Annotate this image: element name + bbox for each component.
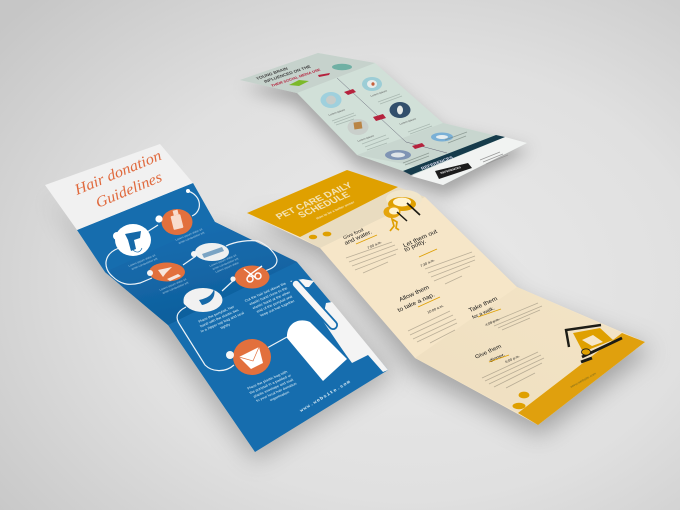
caption: step labels: Lorem ipsum dolor sit	[175, 227, 203, 242]
schedule: food: Give food	[342, 227, 365, 241]
red tags	[344, 89, 425, 149]
leaflet: pet care daily schedule (right)	[247, 170, 645, 425]
footer url: www.website.com	[570, 372, 597, 389]
caption: place ponytail: Place the ponytail, hair	[198, 305, 236, 324]
title: Guidelines	[94, 169, 164, 212]
caption: step labels: amet consectetur elit	[162, 281, 189, 295]
trees icon	[384, 190, 422, 231]
heading: YOUNG BRAIN	[255, 66, 289, 81]
caption: place ponytail: in a zipper top bag and seal	[200, 311, 245, 333]
caption: cut the hair	[244, 282, 296, 317]
step icon: ponytail	[184, 288, 222, 312]
caption: step labels: amet consectetur elit	[212, 257, 239, 271]
schedule: dinner: 6:00 p.m.	[504, 354, 521, 364]
black button	[435, 163, 472, 179]
schedule: food: 7:00 a.m.	[366, 240, 383, 250]
body copy blocks	[346, 242, 544, 388]
captions: Lorem Ipsum	[357, 134, 375, 143]
step icon: label	[191, 243, 229, 261]
title: Hair donation	[72, 147, 164, 199]
step icon: hair dryer	[113, 224, 151, 256]
leaflet: social media infographic (top)	[240, 53, 527, 185]
captions: Lorem Ipsum	[399, 117, 417, 126]
caption: cut the hair: elastic band at the other	[252, 290, 292, 310]
caption: plastic bag: organisation	[269, 391, 290, 402]
schedule: potty: Let them out	[402, 228, 439, 249]
website: www.website.com	[299, 379, 352, 414]
yellow header	[247, 170, 398, 237]
schedule: nap: 10:00 a.m.	[427, 304, 444, 314]
leaflet: social media infographic (top): INFLUENCED ON THE	[263, 64, 312, 84]
white title panel	[45, 144, 193, 230]
caption: step labels: amet consectetur elit	[178, 231, 205, 245]
footer paws	[512, 392, 530, 409]
caption: place ponytail: tightly	[220, 323, 231, 330]
schedule: walk: Take them	[468, 296, 499, 314]
connector path	[106, 191, 287, 371]
navy footer bar	[403, 135, 505, 175]
lower fold panel	[357, 123, 505, 168]
caption: step labels: amet consectetur elit	[131, 257, 158, 271]
caption: step labels	[128, 227, 240, 295]
captions	[328, 89, 417, 143]
step icon: envelope	[226, 339, 271, 375]
schedule: dinner: dinner.	[489, 352, 506, 364]
step icon: bottle	[155, 209, 192, 235]
shaded fold panel	[105, 222, 297, 325]
schedule: potty: to potty.	[403, 238, 428, 253]
yellow footer	[518, 333, 645, 425]
title: SCHEDULE	[296, 190, 353, 220]
title: PET CARE DAILY	[274, 180, 356, 222]
schedule: food	[342, 227, 383, 250]
caption: step labels: Lorem ipsum dolor sit	[128, 253, 156, 268]
caption: cut the hair: elastic band close to the	[249, 286, 288, 306]
captions: Lorem Ipsum	[328, 108, 346, 117]
caption: plastic bag: the ponytail in a padded or	[249, 373, 293, 395]
schedule: walk: for a walk.	[471, 306, 496, 321]
header icons	[332, 64, 352, 70]
schedule: food: and water.	[344, 230, 374, 247]
header panel	[240, 53, 375, 93]
beige body	[247, 170, 645, 425]
centre timeline	[337, 78, 447, 153]
schedule: potty: 7:30 a.m.	[419, 258, 436, 268]
mailbox illustration	[287, 279, 388, 381]
tan band	[300, 187, 425, 248]
caption: step labels: Lorem ipsum dolor sit	[159, 277, 187, 292]
captions: Lorem Ipsum	[370, 89, 388, 98]
step icon: hands	[147, 262, 185, 282]
caption: plastic bag	[247, 370, 298, 403]
caption: cut the hair: Cut the hair just above the	[244, 282, 287, 303]
caption: cut the hair: end of the ponytail and	[256, 295, 293, 314]
leaflet: social media infographic (top): THEIR SOCIAL MEDIA USE	[271, 68, 322, 88]
caption: step labels: Lorem ipsum dolor sit	[209, 253, 237, 268]
white footer strip	[411, 137, 527, 185]
fold panel	[415, 287, 622, 413]
schedule: nap: to take a nap.	[396, 292, 436, 314]
caption: cut the hair: keep out hair together	[259, 299, 296, 317]
caption: place ponytail: band with the elastic ties	[199, 308, 240, 328]
leaflet: social media infographic (top): REFERENCES	[439, 165, 462, 175]
schedule: nap	[396, 284, 444, 314]
surface shadows	[50, 72, 652, 462]
schedule: potty	[402, 228, 439, 268]
caption: plastic bag: plastic envelope and mail	[253, 378, 294, 398]
caption: plastic bag: Place the plastic bag with	[247, 370, 288, 390]
paw prints	[309, 232, 331, 239]
social icons	[320, 77, 453, 160]
blue body	[77, 183, 388, 452]
caption: plastic bag: to your local hair donation	[255, 382, 298, 403]
schedule: dinner	[474, 344, 521, 364]
schedule: nap: Allow them	[398, 284, 431, 303]
title: How to be a better owner	[315, 200, 356, 220]
schedule: walk	[468, 296, 501, 327]
caption: step labels: Lorem ipsum dolor	[215, 261, 240, 274]
schedule: dinner: Give them	[474, 344, 503, 360]
footer text: REFERENCES	[420, 155, 454, 171]
schedule: walk: 4:00 p.m.	[484, 317, 501, 327]
step icon: scissors	[230, 266, 270, 288]
leaflet: hair donation guidelines (left)	[45, 144, 388, 452]
house icon	[566, 325, 622, 362]
